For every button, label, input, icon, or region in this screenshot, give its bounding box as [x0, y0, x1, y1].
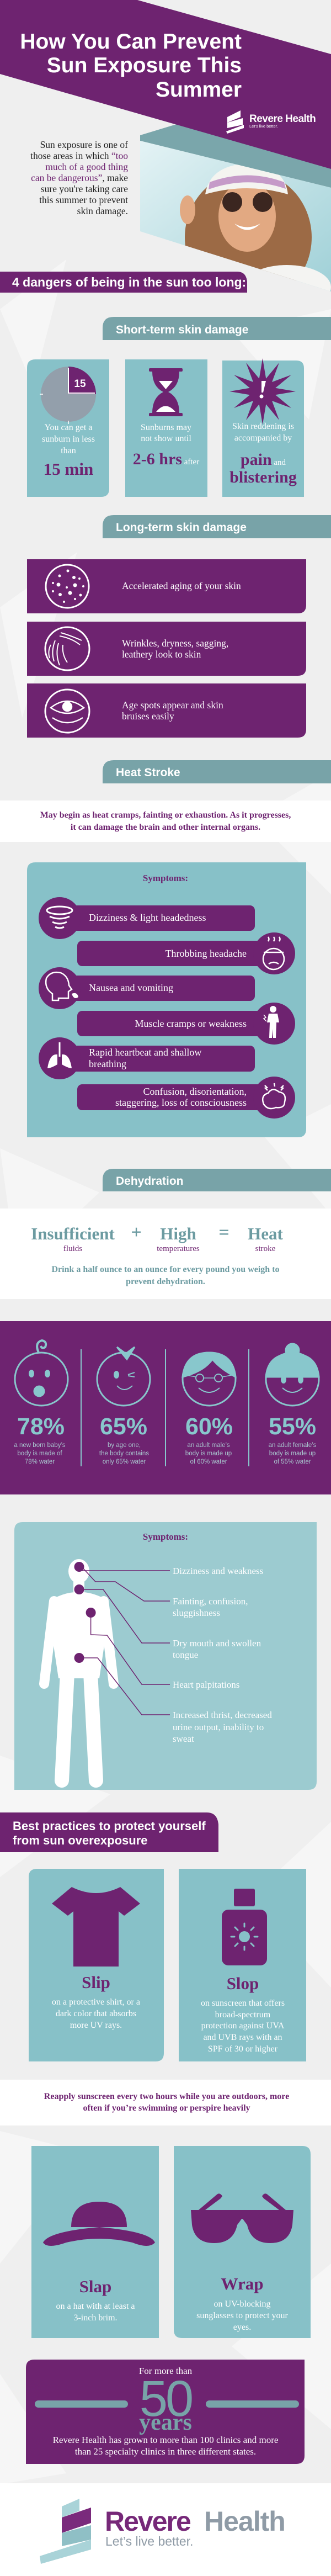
callout: 50 years: For more than [139, 2366, 193, 2376]
header: dehydration [103, 1169, 331, 1191]
icon: man [183, 1353, 236, 1406]
stats: 78% [17, 1413, 65, 1440]
equation band [0, 1209, 331, 1299]
symptom: muscle cramps: Muscle cramps or weakness [135, 1018, 247, 1029]
title: Sun Exposure This [47, 54, 242, 77]
panel: heat stroke symptoms: Symptoms: [143, 873, 188, 883]
card: slip: on a protective shirt, or a [52, 1997, 140, 2007]
icon: sunglasses [191, 2193, 293, 2243]
card: slop: Slop [227, 1974, 259, 1993]
card: slop: on sunscreen that offers [201, 1999, 285, 2008]
header: short-term: Short-term skin damage [116, 324, 248, 336]
header: short-term [103, 317, 331, 340]
symptom: nausea: Nausea and vomiting [89, 982, 173, 993]
symptom labels: urine output, inability to [173, 1722, 264, 1732]
symptom: heartbeat: Rapid heartbeat and shallow [89, 1047, 201, 1058]
card: pain and blistering: accompanied by [234, 433, 292, 443]
panel: water percentages: by age one, [108, 1442, 141, 1449]
symptom: dizziness [39, 897, 255, 939]
banner: best practices [0, 1812, 218, 1852]
icon: hourglass [149, 368, 183, 416]
heat stroke intro band: it can damage the brain and other internal organs. [71, 823, 260, 832]
card: slip: Slip [82, 1973, 110, 1992]
card: slop [179, 1869, 306, 2061]
card: wrap: sunglasses to protect your [196, 2311, 289, 2320]
panel: water percentages: an adult female’s [269, 1442, 317, 1449]
symptom: heartbeat: breathing [89, 1058, 126, 1069]
heat stroke intro band [0, 801, 331, 842]
card: slap: on a hat with at least a [56, 2302, 135, 2311]
callout: 50 years [26, 2360, 305, 2464]
intro text: can be dangerous”, make [31, 172, 128, 183]
intro text: much of a good thing [45, 161, 128, 172]
row: age spots [27, 683, 306, 738]
symptom: dizziness: Dizziness & light headedness [89, 912, 206, 923]
panel: water percentages: only 65% water [103, 1459, 146, 1465]
card: slop: broad-spectrum [215, 2010, 271, 2020]
icon: woman [266, 1344, 319, 1406]
row: wrinkles [27, 622, 306, 676]
equation band: stroke [255, 1244, 276, 1253]
row: wrinkles: leathery look to skin [122, 649, 201, 660]
symptom labels: Heart palpitations [173, 1679, 239, 1690]
panel: water percentages: body is made up [185, 1450, 232, 1457]
hero photo [140, 125, 331, 291]
equation band: prevent dehydration. [126, 1277, 205, 1286]
stats: 60% [185, 1413, 233, 1440]
card: 15 min: 15 min [44, 459, 93, 479]
panel: water percentages: body is made of [17, 1450, 62, 1457]
icon: clock: 15 [74, 378, 86, 390]
intro text: sure you're taking care [41, 183, 128, 194]
card: pain and blistering: pain and [241, 450, 286, 469]
callout: 50 years: years [139, 2410, 192, 2435]
symptom: confusion [77, 1077, 295, 1119]
row: accelerated aging: Accelerated aging of your skin [122, 580, 241, 591]
symptom: nausea [39, 967, 255, 1009]
symptom labels: sweat [173, 1734, 194, 1744]
logo: top: Let’s live better. [249, 124, 278, 129]
icon: hat [43, 2202, 155, 2246]
intro text: this summer to prevent [39, 194, 128, 205]
icon: eye [45, 690, 89, 733]
icon: baby [15, 1340, 68, 1406]
equation band: fluids [63, 1244, 82, 1253]
header: heat stroke: Heat Stroke [116, 766, 180, 779]
title: How You Can Prevent [20, 30, 242, 54]
title [20, 30, 242, 102]
card: pain and blistering: blistering [229, 468, 297, 486]
callout: 50 years: Revere Health has grown to more than 100 clinics and more [53, 2435, 278, 2445]
card: 15 min [27, 359, 109, 497]
logo: footer: Health [204, 2506, 285, 2537]
footer [0, 2483, 331, 2576]
panel: water percentages: of 60% water [190, 1459, 227, 1465]
equation band: Insufficient [31, 1224, 115, 1243]
card: 2-6 hrs [125, 359, 207, 497]
card: slop: protection against UVA [201, 2021, 285, 2031]
title: Summer [156, 78, 242, 102]
header: long-term [103, 515, 331, 538]
heat stroke intro band: May begin as heat cramps, fainting or exhaustion. As it progresses, [40, 810, 291, 820]
header: heat stroke [103, 760, 331, 783]
symptom labels [173, 1566, 272, 1744]
banner: best practices: from sun overexposure [13, 1833, 148, 1847]
equation band: = [218, 1222, 229, 1243]
equation band: Drink a half ounce to an ounce for every pound you weigh to [51, 1265, 280, 1274]
row: age spots: bruises easily [122, 711, 174, 722]
card: slop: and UVB rays with an [203, 2033, 282, 2042]
card: wrap: Wrap [221, 2274, 263, 2293]
panel: water percentages: a new born baby’s [14, 1442, 66, 1449]
panel: water percentages [0, 1321, 331, 1494]
equation band: temperatures [157, 1244, 200, 1253]
symptom labels: Dizziness and weakness [173, 1566, 263, 1576]
card: 15 min: sunburn in less [42, 434, 95, 444]
row: age spots: Age spots appear and skin [122, 699, 223, 711]
banner: 4 dangers [0, 272, 247, 293]
card: slap: 3-inch brim. [73, 2313, 118, 2323]
symptom labels: sluggishness [173, 1608, 220, 1618]
icon: burst [229, 358, 296, 425]
panel: dehydration symptoms [14, 1522, 317, 1790]
reapply band: Reapply sunscreen every two hours while you are outdoors, more [44, 2092, 289, 2101]
row: accelerated aging [27, 559, 306, 613]
card: slip [29, 1869, 164, 2061]
symptom: heartbeat [39, 1037, 255, 1079]
callout: 50 years: 50 [140, 2371, 192, 2427]
symptom labels: Fainting, confusion, [173, 1596, 248, 1607]
intro text: Sun exposure is one of [40, 139, 128, 150]
symptom: headache [77, 932, 295, 974]
logo: footer [40, 2499, 285, 2564]
header: dehydration: Dehydration [116, 1175, 184, 1188]
card: slap [31, 2146, 159, 2338]
icon: wrinkles [45, 627, 89, 670]
card: pain and blistering [222, 358, 304, 497]
banner: 4 dangers: 4 dangers of being in the sun too long: [12, 275, 246, 289]
card: 2-6 hrs: 2-6 hrs after [133, 450, 199, 468]
card: 15 min: You can get a [45, 423, 92, 432]
panel: water percentages: of 55% water [274, 1459, 311, 1465]
symptom labels: Increased thrist, decreased [173, 1710, 272, 1720]
card: slip: more UV rays. [70, 2021, 122, 2030]
intro text [30, 139, 128, 216]
card: 2-6 hrs: Sunburns may [141, 423, 191, 432]
panel: water percentages: the body contains [99, 1450, 149, 1457]
icon: sunscreen bottle [222, 1889, 267, 1965]
icon: skin dots [46, 565, 89, 608]
title band [0, 0, 331, 169]
card: slap: Slap [79, 2277, 111, 2296]
symptom dots [74, 1562, 96, 1663]
row: wrinkles: Wrinkles, dryness, sagging, [122, 638, 228, 649]
stats: 65% [100, 1413, 147, 1440]
logo: top: Revere Health [249, 113, 316, 125]
card: pain and blistering: Skin reddening is [232, 422, 294, 431]
icon: t-shirt [52, 1887, 140, 1967]
panel: water percentages: body is made up [269, 1450, 316, 1457]
intro text: those areas in which “too [30, 150, 128, 161]
panel: heat stroke symptoms [27, 862, 306, 1137]
reapply band: often if you’re swimming or perspire heavily [83, 2103, 250, 2113]
symptom: muscle cramps [77, 1003, 295, 1045]
symptom: headache: Throbbing headache [166, 948, 247, 959]
symptom: confusion: Confusion, disorientation, [143, 1086, 247, 1097]
logo: footer: Let’s live better. [105, 2534, 193, 2548]
intro text: skin damage. [77, 205, 128, 216]
card: wrap: eyes. [233, 2323, 251, 2332]
logo: footer: Revere [105, 2506, 191, 2537]
equation band: High [160, 1224, 196, 1243]
symptom: confusion: staggering, loss of consciousness [115, 1097, 247, 1108]
panel: water percentages: an adult male’s [187, 1442, 230, 1449]
logo: top [226, 110, 316, 134]
stats: 55% [269, 1413, 316, 1440]
symptom labels: Dry mouth and swollen [173, 1638, 261, 1649]
symptom labels: tongue [173, 1650, 198, 1660]
banner: best practices: Best practices to protect yourself [13, 1819, 206, 1833]
card: 15 min: than [61, 446, 76, 455]
equation band: + [131, 1222, 142, 1243]
icon: body silhouette [44, 1559, 114, 1780]
header: long-term: Long-term skin damage [116, 521, 247, 534]
panel: dehydration symptoms: Symptoms: [143, 1531, 188, 1542]
card: wrap [174, 2146, 311, 2338]
card: 2-6 hrs: not show until [141, 434, 191, 443]
equation band: Heat [248, 1224, 284, 1243]
card: slip: dark color that absorbs [56, 2009, 136, 2018]
callout: 50 years: than 25 specialty clinics in three different states. [75, 2446, 256, 2457]
card: slop: SPF of 30 or higher [208, 2044, 278, 2054]
reapply band [0, 2080, 331, 2126]
icon: clock [40, 367, 96, 424]
card: wrap: on UV-blocking [214, 2299, 270, 2309]
connector lines [79, 1568, 170, 1715]
panel: water percentages: 78% water [25, 1459, 55, 1465]
icon: toddler [97, 1347, 150, 1406]
stats [17, 1413, 316, 1440]
